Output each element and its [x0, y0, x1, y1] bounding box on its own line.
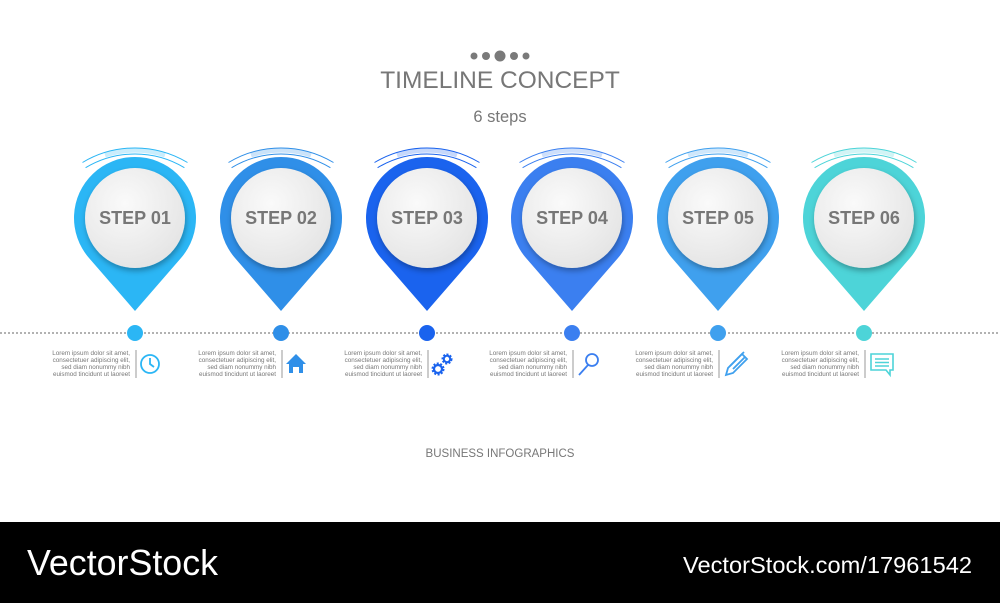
step 6: euismod tincidunt ut laoreet [782, 371, 859, 378]
step 4: Lorem ipsum dolor sit amet, [489, 350, 567, 357]
icon: gears [432, 354, 452, 374]
step 6: STEP 06 [828, 208, 900, 228]
step 5: consectetuer adipiscing elit, [636, 357, 713, 364]
icon: clock [141, 355, 159, 373]
step 4: consectetuer adipiscing elit, [490, 357, 567, 364]
step 3: Lorem ipsum dolor sit amet, [344, 350, 422, 357]
step 1 [52, 148, 196, 378]
step 2: euismod tincidunt ut laoreet [199, 371, 276, 378]
step 6: Lorem ipsum dolor sit amet, [781, 350, 859, 357]
step 3: STEP 03 [391, 208, 463, 228]
subtitle: 6 steps [473, 108, 527, 126]
step 3: sed diam nonummy nibh [353, 364, 422, 371]
watermark band [0, 522, 1000, 603]
step 4: STEP 04 [536, 208, 608, 228]
step 4: euismod tincidunt ut laoreet [490, 371, 567, 378]
step 1: euismod tincidunt ut laoreet [53, 371, 130, 378]
step 3 [344, 148, 488, 378]
watermark band: VectorStock [27, 542, 219, 583]
step 2: Lorem ipsum dolor sit amet, [198, 350, 276, 357]
step 2: consectetuer adipiscing elit, [199, 357, 276, 364]
icon: chat [871, 354, 893, 375]
step 2 [198, 148, 342, 378]
step 1: Lorem ipsum dolor sit amet, [52, 350, 130, 357]
step 3: euismod tincidunt ut laoreet [345, 371, 422, 378]
step 3: consectetuer adipiscing elit, [345, 357, 422, 364]
dots above title [470, 50, 530, 62]
step 4: sed diam nonummy nibh [498, 364, 567, 371]
title: TIMELINE CONCEPT [380, 67, 620, 94]
step 4 [489, 148, 633, 378]
timeline dotted line [0, 332, 1000, 334]
step 1: STEP 01 [99, 208, 171, 228]
icon: pencil [726, 352, 747, 375]
step 1: consectetuer adipiscing elit, [53, 357, 130, 364]
watermark band: VectorStock.com/17961542 [683, 552, 972, 578]
step 5: Lorem ipsum dolor sit amet, [635, 350, 713, 357]
step 1: sed diam nonummy nibh [61, 364, 130, 371]
step 6: sed diam nonummy nibh [790, 364, 859, 371]
footer caption: BUSINESS INFOGRAPHICS [426, 448, 575, 460]
step 2: sed diam nonummy nibh [207, 364, 276, 371]
icon: magnifier [579, 354, 598, 375]
step 5: euismod tincidunt ut laoreet [636, 371, 713, 378]
step 6: consectetuer adipiscing elit, [782, 357, 859, 364]
step 5: STEP 05 [682, 208, 754, 228]
step 2: STEP 02 [245, 208, 317, 228]
step 6 [781, 148, 925, 378]
step 5 [635, 148, 779, 378]
icon: home [286, 354, 306, 373]
step 5: sed diam nonummy nibh [644, 364, 713, 371]
